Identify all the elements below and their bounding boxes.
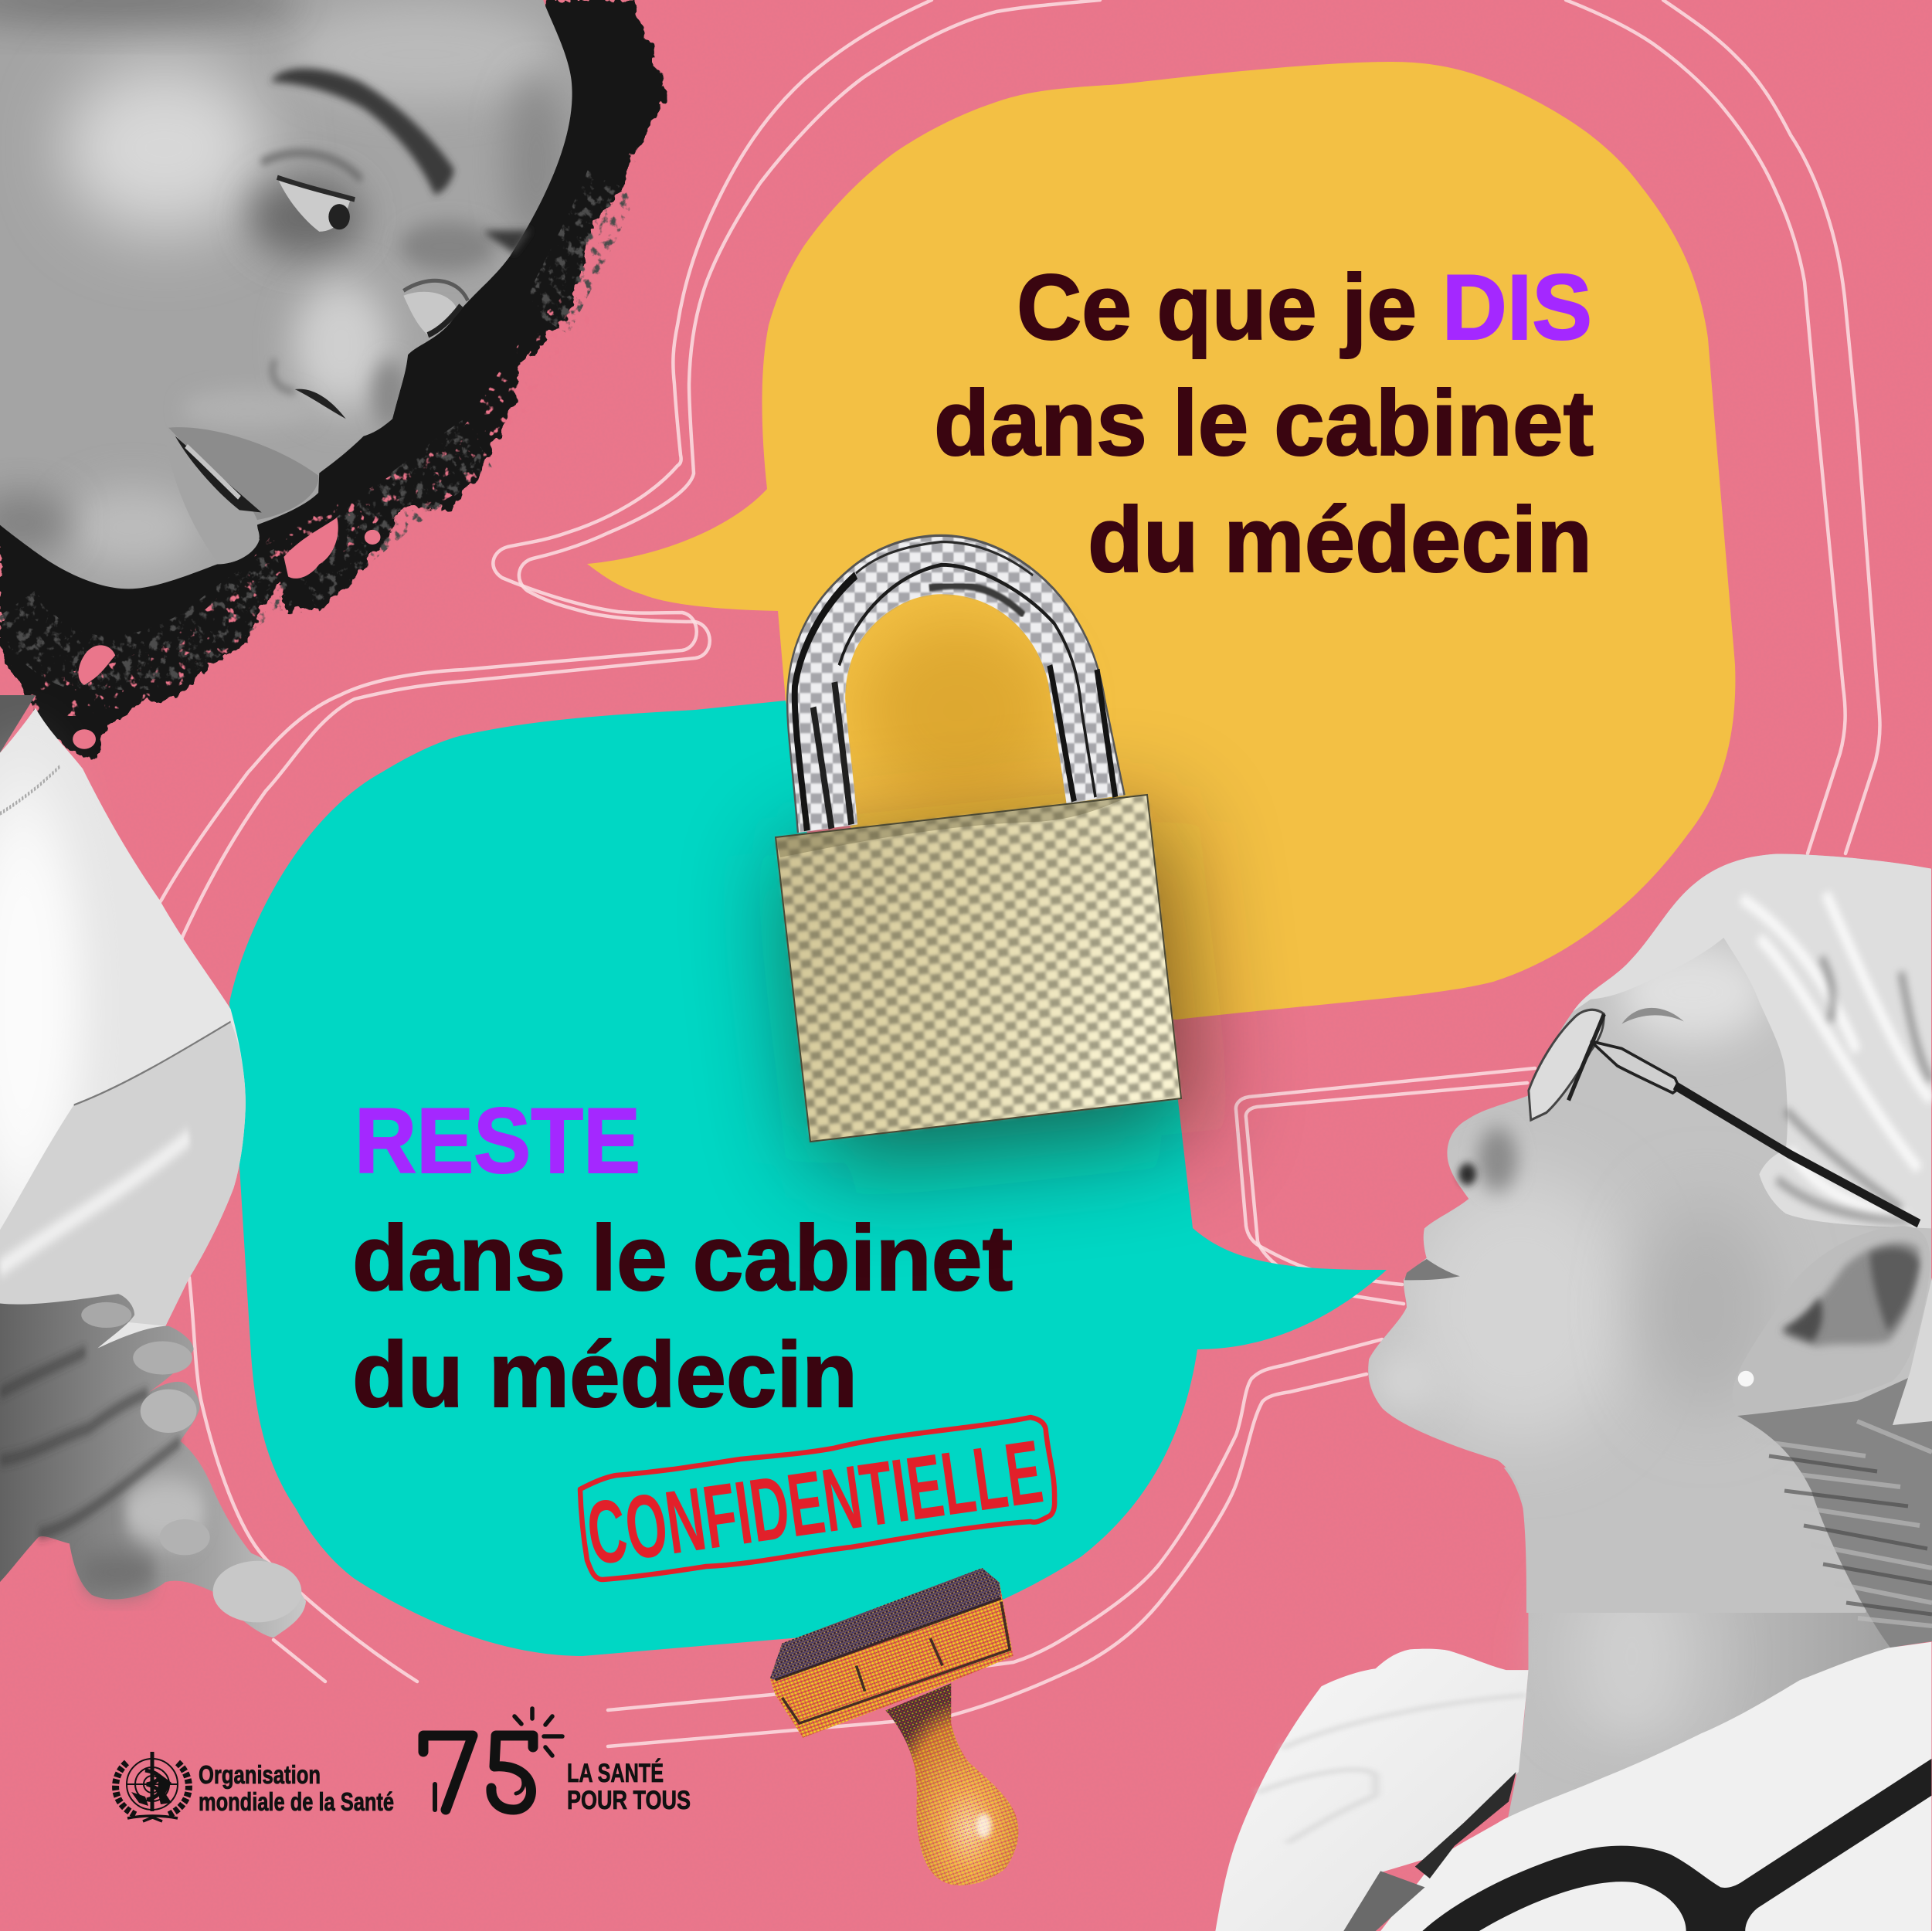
short gray back hair [1737,1278,1932,1648]
organisation name: mondiale de la Santé [199,1787,394,1816]
curly hair [0,0,665,762]
fingernails [81,1302,301,1622]
slogan: POUR TOUS [567,1786,691,1815]
nostril [1458,1163,1476,1185]
eyebrow [270,69,454,195]
padlock [776,535,1181,1142]
logo: World Health Organization [116,1752,394,1821]
lock body [776,795,1181,1142]
glasses [1529,1010,1919,1223]
heading: what I say in the doctor's office: du médecin [1088,488,1592,592]
ear [1732,1226,1930,1413]
heading: what I say in the doctor's office: dans le cabinet [934,372,1594,475]
heading: stays in the doctor's office [352,1089,1013,1427]
head [1368,854,1931,1613]
ribbed sweater [1343,1871,1425,1931]
rubber stamp [770,1568,1018,1885]
dark gap [1415,1772,1516,1878]
heading: what I say in the doctor's office: Ce que je DIS [1017,256,1592,359]
lips [1404,1259,1460,1280]
yellow speech bubble [587,62,1735,1020]
teal speech bubble [229,701,1387,1656]
shirt and neck [0,695,246,1355]
organisation name: Organisation [199,1760,321,1789]
slogan: LA SANTÉ [567,1759,664,1788]
organisation name [199,1760,394,1816]
logo: WHO 75 years [423,1709,691,1815]
eye [262,153,362,232]
nose [273,360,346,419]
heading: what I say in the doctor's office [934,256,1594,592]
eyebrow [1621,1008,1684,1024]
lips [165,427,318,563]
pearl earring [1738,1371,1754,1386]
stethoscope [1422,1759,1931,1931]
collar [1380,1642,1931,1931]
face [0,0,572,589]
photo: woman looking down [0,0,665,1637]
curl texture [13,182,612,665]
lock drop shadow [788,618,1197,1166]
coat shoulder [1215,1649,1528,1931]
icon: 75 with sun rays [423,1709,562,1810]
photo: doctor looking up [1215,854,1932,1931]
stamp head [770,1568,1014,1738]
heading: stays in the doctor's office: du médecin [352,1323,857,1427]
icon: WHO emblem [116,1752,188,1821]
neck [1504,1468,1898,1840]
slogan [567,1759,691,1815]
far eyebrow [484,229,532,254]
hand [0,1294,306,1637]
stamped word: confidential [580,1417,1054,1584]
heading: stays in the doctor's office: dans le cabinet [352,1206,1013,1310]
pink gaps in curls [26,306,572,696]
light gray upper hair [1573,854,1931,1228]
shackle [787,535,1125,833]
second eye [403,280,468,335]
stamp handle [885,1683,1018,1885]
white coat, collar and stethoscope [1215,1642,1931,1931]
stamped word: confidential: CONFIDENTIELLE [581,1421,1048,1584]
heading: stays in the doctor's office: RESTE [355,1089,640,1193]
